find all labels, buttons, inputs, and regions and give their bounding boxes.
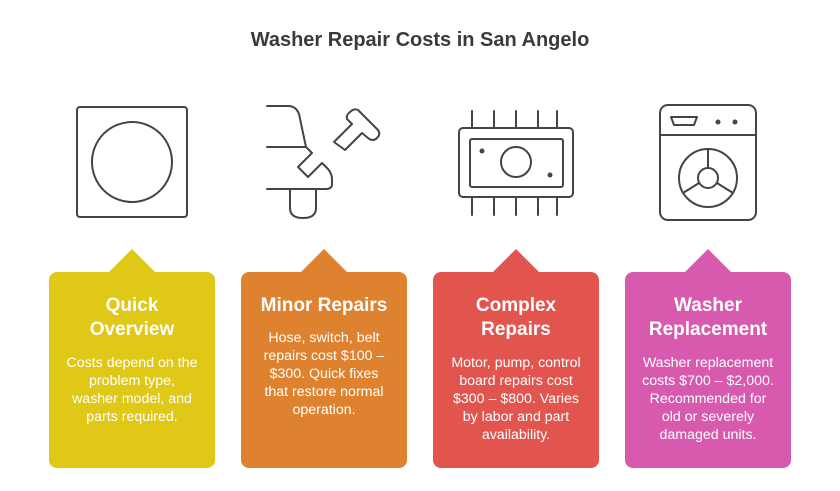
icon: dial (77, 107, 187, 217)
text: damaged units. (659, 427, 756, 443)
text (264, 330, 384, 418)
panel: complex repairs (433, 249, 599, 468)
text (451, 355, 581, 443)
text: costs $700 – $2,000. (642, 373, 774, 389)
title: Washer Repair Costs in San Angelo (251, 29, 589, 51)
panel: minor repairs (241, 249, 407, 468)
heading: Replacement (649, 319, 767, 340)
text: Recommended for (650, 391, 766, 407)
text: old or severely (662, 409, 754, 425)
text: that restore normal (264, 384, 384, 400)
heading: Overview (90, 319, 174, 340)
text: operation. (292, 402, 356, 418)
icons (76, 104, 757, 221)
text: problem type, (89, 373, 175, 389)
heading: Quick (106, 295, 158, 316)
text: Washer replacement (643, 355, 773, 371)
text: repairs cost $100 – (264, 348, 384, 364)
text: $300. Quick fixes (270, 366, 378, 382)
heading: Complex (476, 295, 556, 316)
text: Motor, pump, control (451, 355, 581, 371)
heading: Washer (674, 295, 742, 316)
text: $300 – $800. Varies (453, 391, 579, 407)
heading (90, 295, 174, 340)
text: availability. (482, 427, 550, 443)
icon: tools (267, 106, 379, 218)
text: Hose, switch, belt (268, 330, 380, 346)
text: parts required. (86, 409, 178, 425)
text: washer model, and (72, 391, 192, 407)
text: Costs depend on the (67, 355, 197, 371)
panel: quick overview (49, 249, 215, 468)
heading: Minor Repairs (261, 295, 387, 316)
icon: chip (459, 111, 573, 215)
text: by labor and part (463, 409, 569, 425)
text (67, 355, 197, 425)
text (642, 355, 774, 443)
text: board repairs cost (459, 373, 573, 389)
heading (476, 295, 556, 340)
panel: washer replacement (625, 249, 791, 468)
heading: Repairs (481, 319, 551, 340)
heading (649, 295, 767, 340)
icon: washer (660, 105, 756, 220)
